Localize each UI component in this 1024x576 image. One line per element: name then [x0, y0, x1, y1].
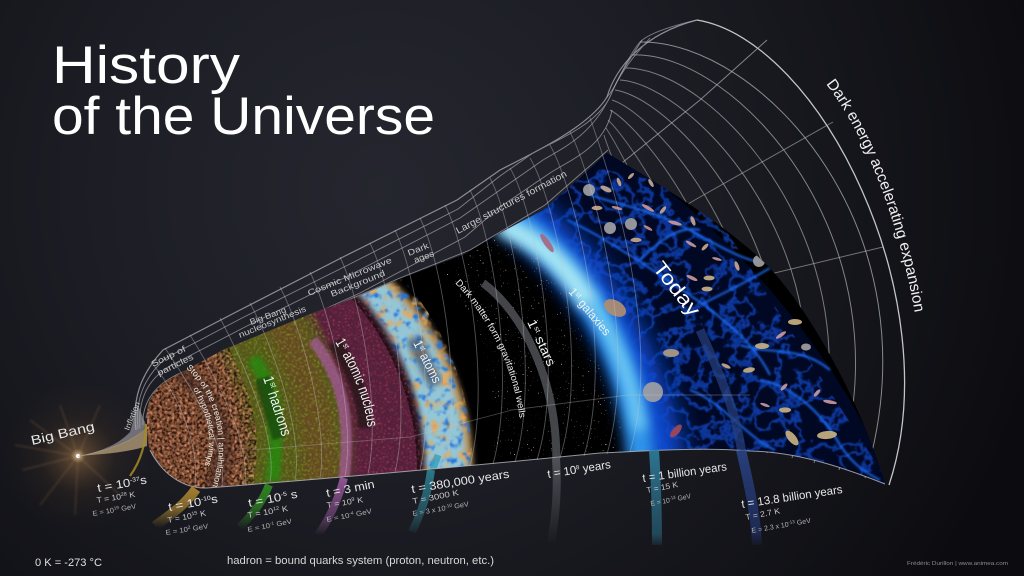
label: cosmic microwave background: Background [329, 268, 387, 299]
title: of the Universe [52, 87, 435, 146]
panel: universe cross-section image [146, 153, 885, 488]
stage data: 10^-5 s: K [279, 504, 289, 514]
heading: dark energy expansion: Dark energy accelerating expansion [826, 78, 922, 312]
credit: Frédéric Durillon | www.animea.com [907, 561, 1008, 567]
label: cosmic microwave background [306, 255, 394, 299]
label: first galaxies: galaxies [573, 294, 614, 338]
stage data: 10^-37 s: T = 10 [96, 493, 120, 505]
band: atomic nucleus text backing [335, 342, 365, 428]
stage data: 10^-37 s: K [126, 490, 137, 500]
timeline ribbons [155, 450, 757, 545]
stage data: 10^-5 s: s [286, 489, 299, 502]
big bang glow [3, 381, 153, 531]
label: first stars: st [532, 326, 541, 334]
stage data: 380,000 years: T = 3000 K [412, 488, 460, 506]
stage data: 13.8 billion years: t = 13.8 billion years [741, 484, 844, 511]
stage data: 10^-5 s: -5 [280, 491, 288, 499]
panel: first galaxies blue glow [500, 205, 665, 480]
grid: wall and floor arcs [151, 118, 641, 486]
label: large structures formation: Large structures formation [454, 169, 569, 237]
ribbon: purple nucleus stage [318, 478, 344, 535]
note: absolute zero: 0 K = -273 °C [35, 557, 102, 569]
panel: first atomic nucleus maroon ring [146, 293, 430, 482]
label: first atoms: 1 [410, 338, 427, 351]
ribbon: teal galaxies stage [654, 450, 657, 545]
stage data: 10^8 years: years [579, 459, 612, 476]
stage data: 10^-5 s: -1 [269, 520, 275, 526]
image bottom edge highlight [150, 449, 885, 488]
ribbon: yellow wimps stage [155, 489, 196, 526]
stage data: 10^8 years: t = 10 [547, 465, 577, 481]
label: stop of creation wimps: Stop of the creation | annihilation [187, 364, 225, 487]
stage data: 380,000 years: -10 [445, 503, 453, 509]
stage data: 3 min: K [354, 495, 365, 506]
stage data: 10^-10 s: GeV [190, 523, 209, 533]
stage data: 380,000 years: GeV [452, 501, 470, 511]
stage data: 10^-5 s: GeV [274, 518, 293, 529]
stage data: 13.8 billion years: GeV [795, 518, 812, 527]
label: dark ages: ages [412, 248, 435, 265]
stage data: 10^-10 s: T = 10 [167, 512, 191, 525]
label: first galaxies: st [574, 291, 583, 300]
stage data: 1 billion years: -13 [669, 495, 676, 501]
label: dark ages: Dark [406, 240, 431, 258]
stage data: 1 billion years [642, 461, 728, 508]
panel: first atoms cosmic microwave ring [146, 278, 478, 470]
band: first atoms teal stripe [431, 455, 438, 475]
ribbon: navy today stage [741, 450, 757, 545]
stage data: 10^-5 s: t = 10 [247, 493, 278, 510]
label: big bang nucleosynthesis: Big Bang [248, 304, 288, 327]
grid: expanding space arcs [270, 20, 905, 485]
stage data: 3 min: E = 10 [326, 513, 347, 524]
label: dark ages [406, 240, 435, 265]
label: first atomic nucleus: st [343, 344, 350, 350]
ribbon: teal atoms stage [412, 470, 431, 532]
stage data: 1 billion years: t = 1 billion years [642, 461, 728, 485]
label: soup of particles [149, 343, 195, 378]
stage data: 380,000 years [411, 469, 511, 518]
stage data: 10^-37 s: E = 10 [92, 508, 113, 518]
stage data: 10^-10 s: t = 10 [167, 497, 198, 514]
stage data: 10^-37 s [92, 474, 148, 518]
stage data: 10^-37 s: 28 [120, 491, 127, 498]
stage data: 10^-10 s: -10 [201, 495, 212, 503]
label: first atoms: atoms [415, 348, 445, 386]
stage data: 10^-5 s [247, 489, 299, 534]
label: today: Today [648, 258, 704, 321]
label: first galaxies: 1 [566, 285, 581, 299]
stage data: 1 billion years: T = 15 K [646, 480, 679, 495]
panel: dark energy cosmic web [538, 153, 885, 484]
label: big bang: Big Bang [29, 419, 96, 448]
stage data: 10^8 years: 8 [576, 465, 580, 471]
stage data: 10^-37 s: t = 10 [96, 478, 127, 495]
stage data: 1 billion years: GeV [675, 493, 692, 503]
band: hadrons green stripe [253, 358, 280, 482]
stage data: 10^-5 s: 12 [272, 505, 280, 512]
stage data: 3 min: t = 3 min [325, 479, 376, 500]
stage data: 10^-37 s: GeV [119, 503, 137, 513]
stage data: 10^-10 s [165, 493, 219, 537]
label: first atomic nucleus: 1 [336, 338, 346, 348]
stage data: 13.8 billion years: -13 [788, 519, 796, 525]
stars field [444, 226, 625, 461]
ribbon: grey stars stage [551, 458, 557, 542]
stage data: 10^-37 s: s [139, 474, 148, 487]
note: hadron definition: hadron = bound quarks system (proton, neutron, etc.) [227, 555, 494, 567]
stage data: 3 min: T = 10 [326, 498, 350, 510]
stage data: 10^-10 s: K [197, 509, 207, 519]
stage data: 10^-10 s: s [210, 493, 219, 506]
grid inside image [250, 395, 750, 450]
label: first hadrons: 1 [259, 374, 278, 387]
stage data: 10^-5 s: T = 10 [247, 507, 271, 520]
ribbon: green hadrons stage [240, 485, 269, 527]
stage data: 13.8 billion years: E = 2.3 x 10 [751, 522, 789, 535]
label: first hadrons: st [268, 381, 278, 389]
label: first atoms: st [418, 345, 426, 352]
label: cosmic microwave background: Cosmic Microwave [306, 255, 394, 298]
label: soup of particles: particles [155, 352, 195, 378]
galaxies [538, 172, 837, 447]
stage data: 3 min: -4 [349, 510, 355, 516]
stage data: 13.8 billion years: T = 2.7 K [745, 506, 781, 522]
stage data: 3 min: GeV [353, 508, 373, 519]
stage data: 10^-5 s: E = 10 [247, 523, 268, 534]
stage data: 10^-37 s: 19 [113, 505, 120, 511]
label: first atomic nucleus: atomic nucleus [343, 352, 376, 426]
label: big bang nucleosynthesis: nucleosynthesis [237, 304, 308, 340]
title: History [52, 36, 241, 95]
label: soup of particles: Soup of [149, 343, 188, 369]
band: first stars grey arc [483, 283, 556, 470]
band: navy stripe [700, 330, 742, 455]
funnel tail from the big bang [78, 405, 147, 476]
stage data: 380,000 years: E = 3 x 10 [412, 506, 445, 518]
stage data: 3 min [325, 479, 376, 524]
label: stop of creation wimps: of hypothetical wimps [194, 388, 216, 466]
label: first stars: stars [530, 330, 559, 369]
title [52, 36, 435, 146]
panel: quark soup brown region [146, 348, 257, 488]
stage data: 10^-10 s: 15 [191, 510, 198, 517]
stage data: 10^-37 s: -37 [130, 476, 141, 484]
stage data: 3 min: 9 [351, 497, 355, 503]
label: dark matter wells: Dark matter form gravitational wells [456, 279, 526, 418]
stage data: 10^-10 s: 2 [187, 525, 191, 530]
label: first hadrons: hadrons [263, 386, 295, 438]
stage data: 10^-10 s: E = 10 [165, 527, 186, 537]
panel: hadrons olive ring [147, 312, 356, 485]
grid: funnel wall longitudinal lines [135, 20, 697, 430]
stage data: 380,000 years: t = 380,000 years [411, 469, 511, 496]
stage data: 1 billion years: E = 10 [650, 497, 671, 508]
label: first stars: 1 [524, 317, 541, 330]
band: atomic nucleus pink stripe [313, 340, 346, 478]
stage data: 13.8 billion years [741, 484, 844, 535]
panel: dark ages black ring [330, 240, 504, 307]
label: inflation: Inflation [123, 401, 142, 432]
